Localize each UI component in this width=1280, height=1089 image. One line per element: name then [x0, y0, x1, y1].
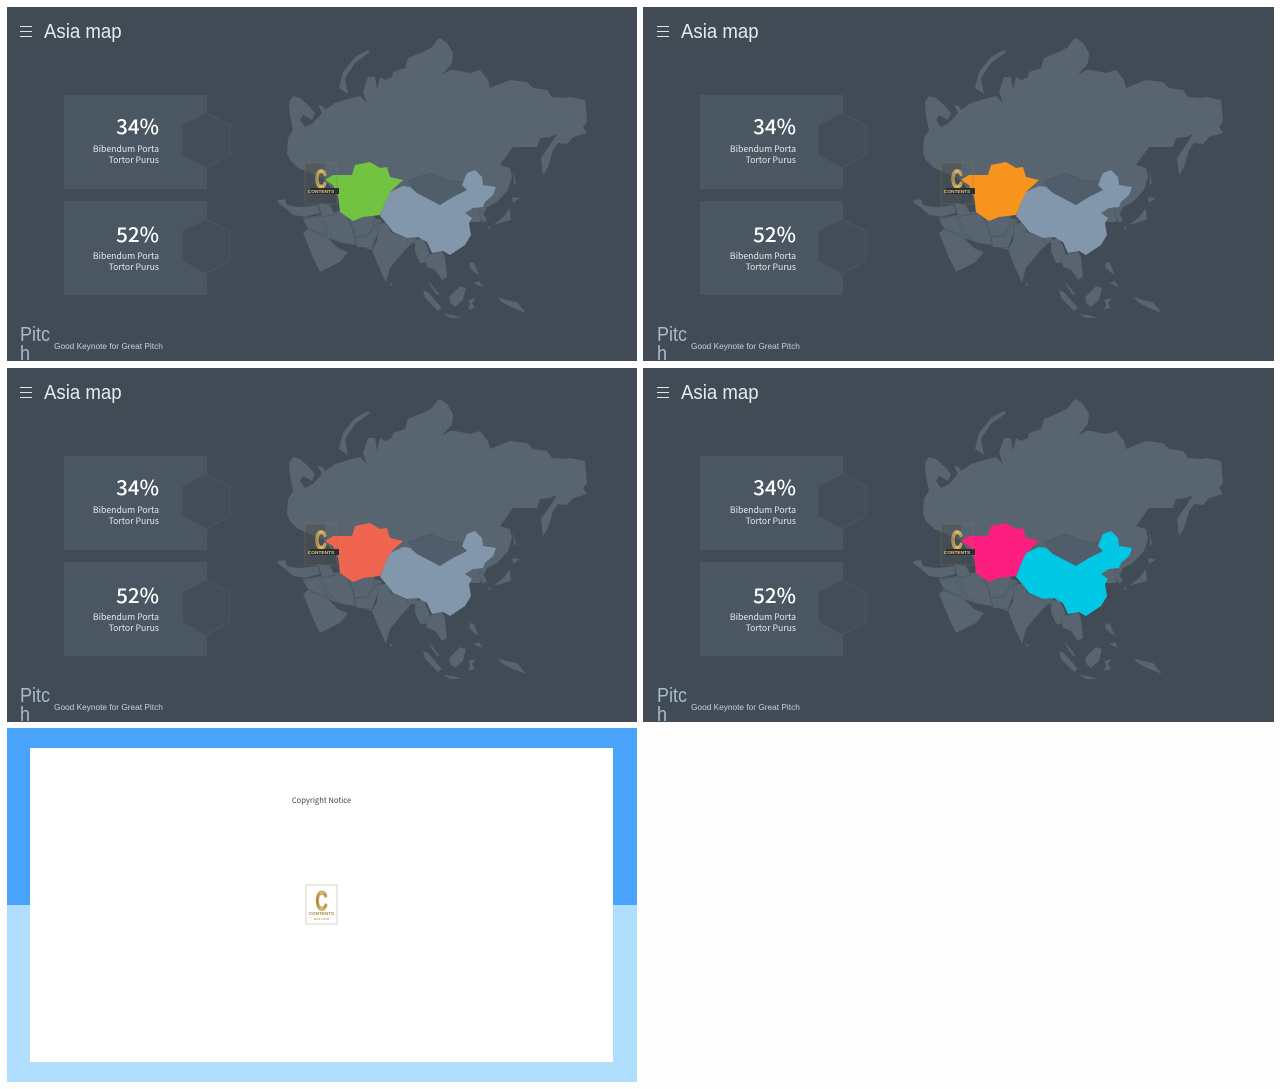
heading: Asia map — [44, 21, 122, 43]
footer brand — [20, 324, 50, 361]
white card — [30, 748, 613, 1062]
highlighted region: Central Asia — [961, 162, 1039, 221]
footer brand — [657, 324, 687, 361]
logo: C — [951, 525, 963, 555]
logo — [305, 163, 339, 204]
stat card: 34%: 34% — [116, 110, 159, 140]
stat card: 34%: Bibendum Porta — [93, 503, 159, 516]
logo: C — [315, 164, 327, 194]
map of Asia — [913, 38, 1223, 318]
map of Asia — [277, 38, 587, 318]
stat card: 34%: Tortor Purus — [746, 514, 796, 526]
logo: CONTENTS — [309, 911, 334, 916]
stat card: 52%: Bibendum Porta — [730, 249, 796, 262]
footer brand: Pitc — [657, 324, 687, 346]
highlighted region: Central Asia — [325, 523, 403, 582]
stat card: 34%: Tortor Purus — [746, 152, 796, 166]
panel: slide 1 — [7, 7, 637, 361]
logo: CONTENTS — [944, 189, 971, 195]
stat card: 34% — [64, 456, 230, 550]
panel: slide 2 — [643, 7, 1274, 361]
stat card: 52% — [64, 201, 230, 295]
stat card: 52%: 52% — [116, 579, 159, 609]
stat card: 34%: 34% — [116, 471, 159, 501]
stat card: 34% — [700, 456, 866, 550]
logo — [305, 524, 339, 565]
footer brand: Pitc — [657, 685, 687, 707]
panel: slide 4 — [643, 368, 1274, 722]
stat card: 52%: 52% — [116, 218, 159, 248]
copyright notice text: Copyright Notice — [292, 795, 351, 806]
footer brand: Pitc — [20, 685, 50, 707]
stat card: 34%: Bibendum Porta — [730, 503, 796, 516]
logo: C — [315, 525, 327, 555]
highlighted region: Central Asia — [325, 162, 403, 221]
heading: Asia map — [681, 21, 759, 43]
icon: menu — [657, 387, 669, 398]
logo: C — [951, 164, 963, 194]
footer tagline: Good Keynote for Great Pitch — [54, 341, 163, 351]
icon: menu — [20, 387, 32, 398]
heading: Asia map — [681, 382, 759, 404]
stat card: 52%: Tortor Purus — [109, 620, 159, 634]
stat card: 52%: Tortor Purus — [746, 620, 796, 634]
stat card: 34%: Bibendum Porta — [93, 142, 159, 155]
stat card: 52%: Bibendum Porta — [93, 610, 159, 623]
highlighted region: China — [380, 531, 496, 616]
footer brand — [657, 685, 687, 722]
logo — [306, 884, 338, 924]
logo: CONTENTS — [308, 550, 335, 556]
stat card: 52%: Bibendum Porta — [93, 249, 159, 262]
footer brand — [20, 685, 50, 722]
footer tagline: Good Keynote for Great Pitch — [691, 341, 800, 351]
highlighted region: China — [1016, 170, 1132, 255]
footer brand: Pitc — [20, 324, 50, 346]
stat card: 52%: Tortor Purus — [109, 260, 159, 272]
logo — [941, 524, 975, 565]
panel: slide 3 — [7, 368, 637, 722]
stat card: 34% — [700, 95, 866, 189]
stat card: 34%: Bibendum Porta — [730, 142, 796, 155]
stat card: 52% — [700, 201, 866, 295]
footer tagline: Good Keynote for Great Pitch — [54, 702, 163, 712]
stat card: 52%: 52% — [753, 579, 796, 609]
footer tagline: Good Keynote for Great Pitch — [691, 702, 800, 712]
stat card: 52% — [700, 562, 866, 656]
logo — [941, 163, 975, 204]
highlighted region: Central Asia — [961, 523, 1039, 582]
stat card: 34%: 34% — [753, 471, 796, 501]
stat card: 34%: Tortor Purus — [109, 152, 159, 166]
logo: CONTENTS — [944, 550, 971, 556]
stat card: 34% — [64, 95, 230, 189]
stat card: 52%: 52% — [753, 218, 796, 248]
map of Asia — [277, 399, 587, 679]
panel: copyright slide — [7, 728, 637, 1082]
highlighted region: China — [380, 170, 496, 255]
stat card: 52%: Tortor Purus — [746, 260, 796, 272]
logo: CONTENTS — [308, 189, 335, 195]
logo: MAS LOUB — [314, 917, 329, 921]
lower light blue band — [7, 905, 637, 1082]
map of Asia — [913, 399, 1223, 679]
icon: menu — [657, 26, 669, 37]
stat card: 52% — [64, 562, 230, 656]
logo: C — [315, 886, 328, 916]
heading: Asia map — [44, 382, 122, 404]
stat card: 34%: Tortor Purus — [109, 514, 159, 526]
stat card: 52%: Bibendum Porta — [730, 610, 796, 623]
icon: menu — [20, 26, 32, 37]
highlighted region: China — [1016, 531, 1132, 616]
stat card: 34%: 34% — [753, 110, 796, 140]
